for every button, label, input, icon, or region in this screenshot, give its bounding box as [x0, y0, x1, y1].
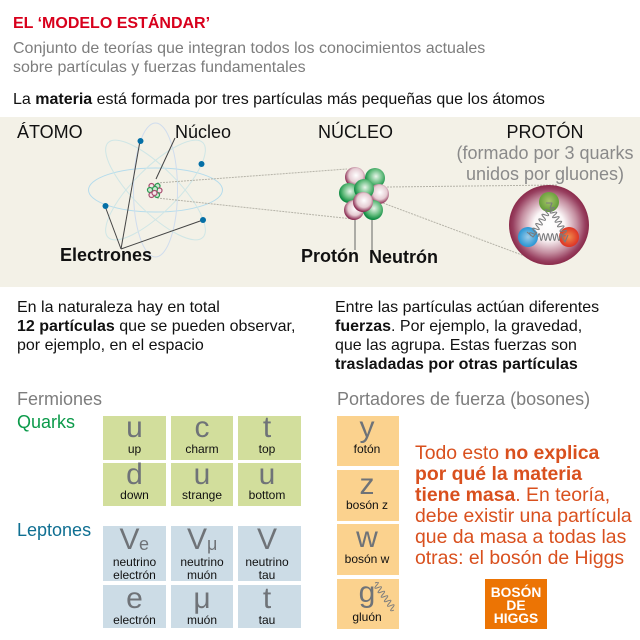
quark: up: u [126, 411, 143, 444]
text block: forces: que las agrupa. Estas fuerzas son [335, 337, 577, 354]
lepton: electron [103, 585, 166, 628]
callout: higgs text: por qué la materia [415, 463, 582, 485]
subtitle [13, 40, 485, 76]
atom nucleus [148, 184, 162, 198]
lepton: electron: e [126, 582, 143, 615]
callout: higgs text: que da masa a todas las [415, 526, 626, 548]
callout: higgs text: debe existir una partícula [415, 505, 632, 527]
badge: higgs boson: BOSÓN [491, 585, 541, 600]
quark: top: t [263, 411, 271, 444]
quark: charm: c [194, 411, 210, 444]
quark: strange [171, 463, 233, 506]
lepton: tau neutrino: neutrino [245, 555, 289, 569]
lepton: muon neutrino: μ [207, 534, 217, 554]
text block: forces: fuerzas. Por ejemplo, la gravedad, [335, 318, 582, 335]
lepton: muon neutrino: V [187, 523, 207, 556]
lepton: tau [238, 585, 301, 628]
boson: photon: fotón [354, 442, 380, 456]
label: neutron particle: Neutrón [369, 247, 438, 267]
boson: gluon: g [359, 576, 375, 609]
label: proton note [456, 143, 634, 184]
panel: matter diagram [0, 117, 640, 287]
text block: particles: por ejemplo, en el espacio [17, 337, 204, 354]
electrons [102, 138, 206, 223]
quark: top: top [259, 442, 275, 456]
intro sentence: La materia está formada por tres partículas más pequeñas que los átomos [13, 91, 545, 108]
quark: down: down [120, 488, 149, 502]
heading: fermions: Fermiones [17, 389, 102, 409]
lepton: muon [171, 585, 233, 628]
quark: bottom: u [259, 458, 275, 491]
label: proton note: (formado por 3 quarks [456, 143, 634, 163]
lepton: tau: t [263, 582, 271, 615]
heading: force carriers: Portadores de fuerza (bosones) [337, 389, 590, 409]
title: EL ‘MODELO ESTÁNDAR’ [13, 15, 210, 32]
label: atom: ÁTOMO [17, 122, 83, 142]
lepton: electron neutrino: V [119, 523, 140, 556]
lepton: tau neutrino [238, 526, 301, 581]
proton with quarks and gluons [509, 185, 589, 265]
boson: w [337, 524, 399, 575]
heading: leptons: Leptones [17, 520, 91, 540]
boson: gluon: gluón [352, 610, 382, 624]
lepton: electron neutrino: neutrino [113, 555, 156, 569]
badge: higgs boson [485, 579, 547, 629]
callout: higgs text: otras: el bosón de Higgs [415, 547, 624, 569]
text block: particles [17, 299, 295, 354]
label: proton note: unidos por gluones) [466, 164, 624, 184]
lepton: tau: tau [259, 613, 275, 627]
quark: bottom: bottom [249, 488, 285, 502]
boson: z: bosón z [346, 498, 388, 512]
dotted connector lines [157, 169, 557, 258]
quark: charm: charm [185, 442, 219, 456]
leader lines [105, 138, 372, 250]
lepton: muon: muón [187, 613, 217, 627]
lepton: muon neutrino: neutrino [180, 555, 224, 569]
heading: quarks: Quarks [17, 412, 75, 432]
nucleus spheres [339, 167, 389, 220]
boson: w: bosón w [345, 552, 389, 566]
quark: up [103, 416, 166, 460]
quark: strange: u [194, 458, 210, 491]
boson: photon: y [360, 411, 374, 444]
icon: gluon wave [374, 582, 394, 612]
callout: higgs text [415, 442, 632, 569]
lepton: electron neutrino: e [139, 534, 149, 554]
lepton: tau neutrino: tau [259, 568, 275, 582]
quark: strange: strange [182, 488, 222, 502]
callout: higgs text: Todo esto no explica [415, 442, 599, 464]
text block: particles: 12 partículas que se pueden observar, [17, 318, 295, 335]
callout: higgs text: tiene masa. En teoría, [415, 484, 610, 506]
label: proton heading: PROTÓN [506, 122, 584, 142]
lepton: muon neutrino [171, 526, 233, 581]
boson: photon [337, 416, 399, 466]
text block: forces: Entre las partículas actúan diferentes [335, 299, 599, 316]
boson: z [337, 470, 399, 521]
badge: higgs boson: DE [506, 598, 526, 613]
subtitle: Conjunto de teorías que integran todos los conocimientos actuales [13, 40, 485, 57]
boson: z: z [360, 468, 374, 501]
quark: charm [171, 416, 233, 460]
lepton: electron neutrino: electrón [113, 568, 156, 582]
atom orbits [88, 123, 222, 257]
lepton: electron neutrino [103, 526, 166, 581]
label: electrons: Electrones [60, 245, 152, 265]
quark: down: d [126, 458, 143, 491]
quark: up: up [128, 442, 141, 456]
label: nucleus: NÚCLEO [318, 122, 393, 142]
label: nucleus part: Núcleo [175, 122, 231, 142]
lepton: tau neutrino: V [257, 523, 277, 556]
quark: bottom [238, 463, 301, 506]
subtitle: sobre partículas y fuerzas fundamentales [13, 59, 306, 76]
boson: gluon [337, 579, 399, 629]
badge: higgs boson: HIGGS [494, 611, 538, 626]
text block: forces [335, 299, 599, 373]
label: proton particle: Protón [301, 246, 359, 266]
diagram artwork [88, 122, 589, 265]
quark: top [238, 416, 301, 460]
lepton: muon neutrino: muón [187, 568, 217, 582]
lepton: muon: μ [193, 582, 211, 615]
text block: forces: trasladadas por otras partículas [335, 356, 578, 373]
lepton: electron: electrón [113, 613, 156, 627]
quark: down [103, 463, 166, 506]
text block: particles: En la naturaleza hay en total [17, 299, 220, 316]
boson: w: w [356, 521, 378, 554]
